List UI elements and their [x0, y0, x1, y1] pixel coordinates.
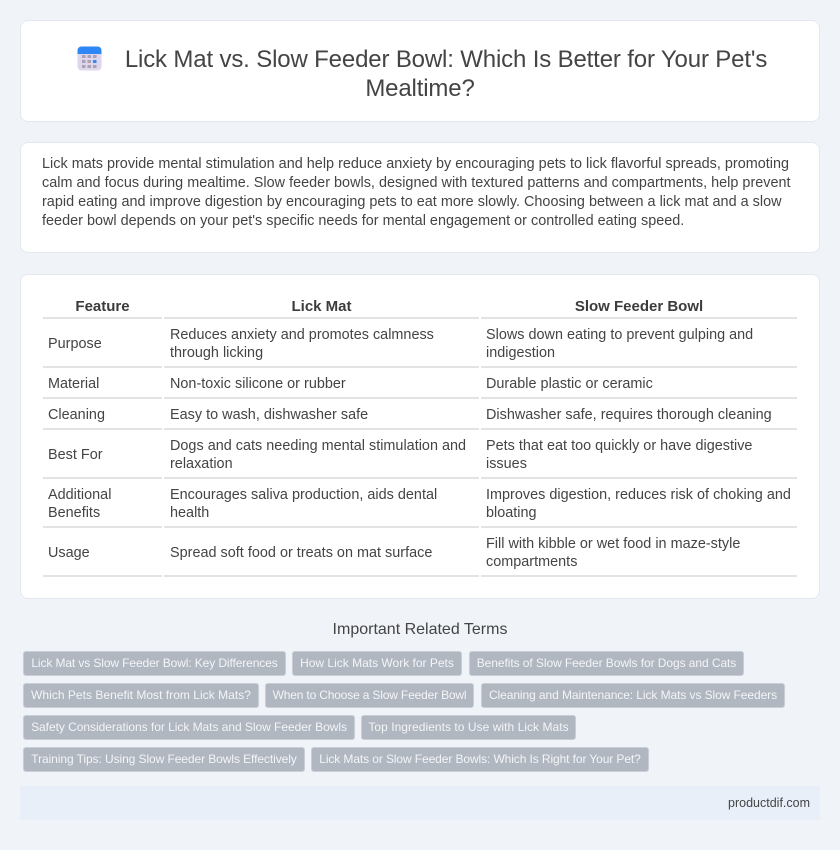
related term tags: When to Choose a Slow Feeder Bowl	[273, 688, 466, 702]
comparison table: Durable plastic or ceramic	[486, 376, 653, 392]
panel: introduction	[20, 142, 820, 253]
related term tags: Which Pets Benefit Most from Lick Mats?	[31, 688, 251, 702]
panel: comparison table	[20, 274, 820, 599]
comparison table: Pets that eat too quickly or have digestive	[486, 438, 752, 454]
title: Lick Mat vs. Slow Feeder Bowl: Which Is Better for Your Pet's	[125, 46, 767, 73]
comparison table: Cleaning	[48, 407, 105, 423]
title	[125, 46, 767, 102]
comparison table: relaxation	[170, 456, 233, 472]
related term tags: Training Tips: Using Slow Feeder Bowls Effectively	[31, 752, 297, 766]
comparison table: Material	[48, 376, 99, 392]
comparison table: Best For	[48, 447, 103, 463]
comparison table: compartments	[486, 554, 577, 570]
footer bar	[20, 786, 820, 820]
text block: introduction: calm and focus during mealtime. Slow feeder bowls, designed with textured patterns and compartments, help prevent	[42, 175, 791, 191]
comparison table: Benefits	[48, 505, 100, 521]
comparison table: issues	[486, 456, 527, 472]
footer source: productdif.com	[728, 796, 810, 810]
comparison table: through licking	[170, 345, 263, 361]
comparison table: Encourages saliva production, aids dental	[170, 487, 437, 503]
related term tags: Cleaning and Maintenance: Lick Mats vs Slow Feeders	[489, 688, 777, 702]
comparison table: indigestion	[486, 345, 555, 361]
comparison table: Improves digestion, reduces risk of choking and	[486, 487, 791, 503]
related term tags: Lick Mat vs Slow Feeder Bowl: Key Differences	[31, 656, 278, 670]
comparison table: Spread soft food or treats on mat surface	[170, 545, 432, 561]
title: Mealtime?	[365, 75, 475, 102]
comparison table: health	[170, 505, 209, 521]
comparison table: Slow Feeder Bowl	[575, 298, 703, 315]
related term tags	[23, 651, 785, 772]
related term tags: Benefits of Slow Feeder Bowls for Dogs and Cats	[477, 656, 736, 670]
comparison table: Dishwasher safe, requires thorough cleaning	[486, 407, 772, 423]
related term tags: Top Ingredients to Use with Lick Mats	[368, 720, 569, 734]
icon: calendar	[78, 46, 102, 70]
comparison table: Non-toxic silicone or rubber	[170, 376, 346, 392]
comparison table: Reduces anxiety and promotes calmness	[170, 327, 434, 343]
comparison table: Purpose	[48, 336, 102, 352]
panel: header	[20, 20, 820, 122]
text block: introduction: rapid eating and improve digestion by encouraging pets to eat more slowly. Choosing between a lick mat and a slow	[42, 194, 782, 210]
comparison table: Feature	[75, 298, 130, 315]
related term tags: Lick Mats or Slow Feeder Bowls: Which Is Right for Your Pet?	[319, 752, 641, 766]
comparison table: Lick Mat	[291, 298, 352, 315]
text block: introduction: feeder bowl depends on your pet's specific needs for mental engagement or controlled eating speed.	[42, 213, 684, 229]
comparison table: Fill with kibble or wet food in maze-style	[486, 536, 740, 552]
heading: related terms: Important Related Terms	[333, 621, 507, 638]
related term tags: How Lick Mats Work for Pets	[300, 656, 454, 670]
comparison table: bloating	[486, 505, 537, 521]
comparison table: Slows down eating to prevent gulping and	[486, 327, 753, 343]
related term tags: Safety Considerations for Lick Mats and Slow Feeder Bowls	[31, 720, 347, 734]
comparison table: Additional	[48, 487, 111, 503]
comparison table: Easy to wash, dishwasher safe	[170, 407, 368, 423]
comparison table: Dogs and cats needing mental stimulation and	[170, 438, 466, 454]
comparison table	[43, 298, 797, 577]
text block: introduction: Lick mats provide mental stimulation and help reduce anxiety by encouraging pets to lick flavorful spreads, promoting	[42, 156, 789, 172]
comparison table: Usage	[48, 545, 90, 561]
text block: introduction	[42, 156, 791, 229]
